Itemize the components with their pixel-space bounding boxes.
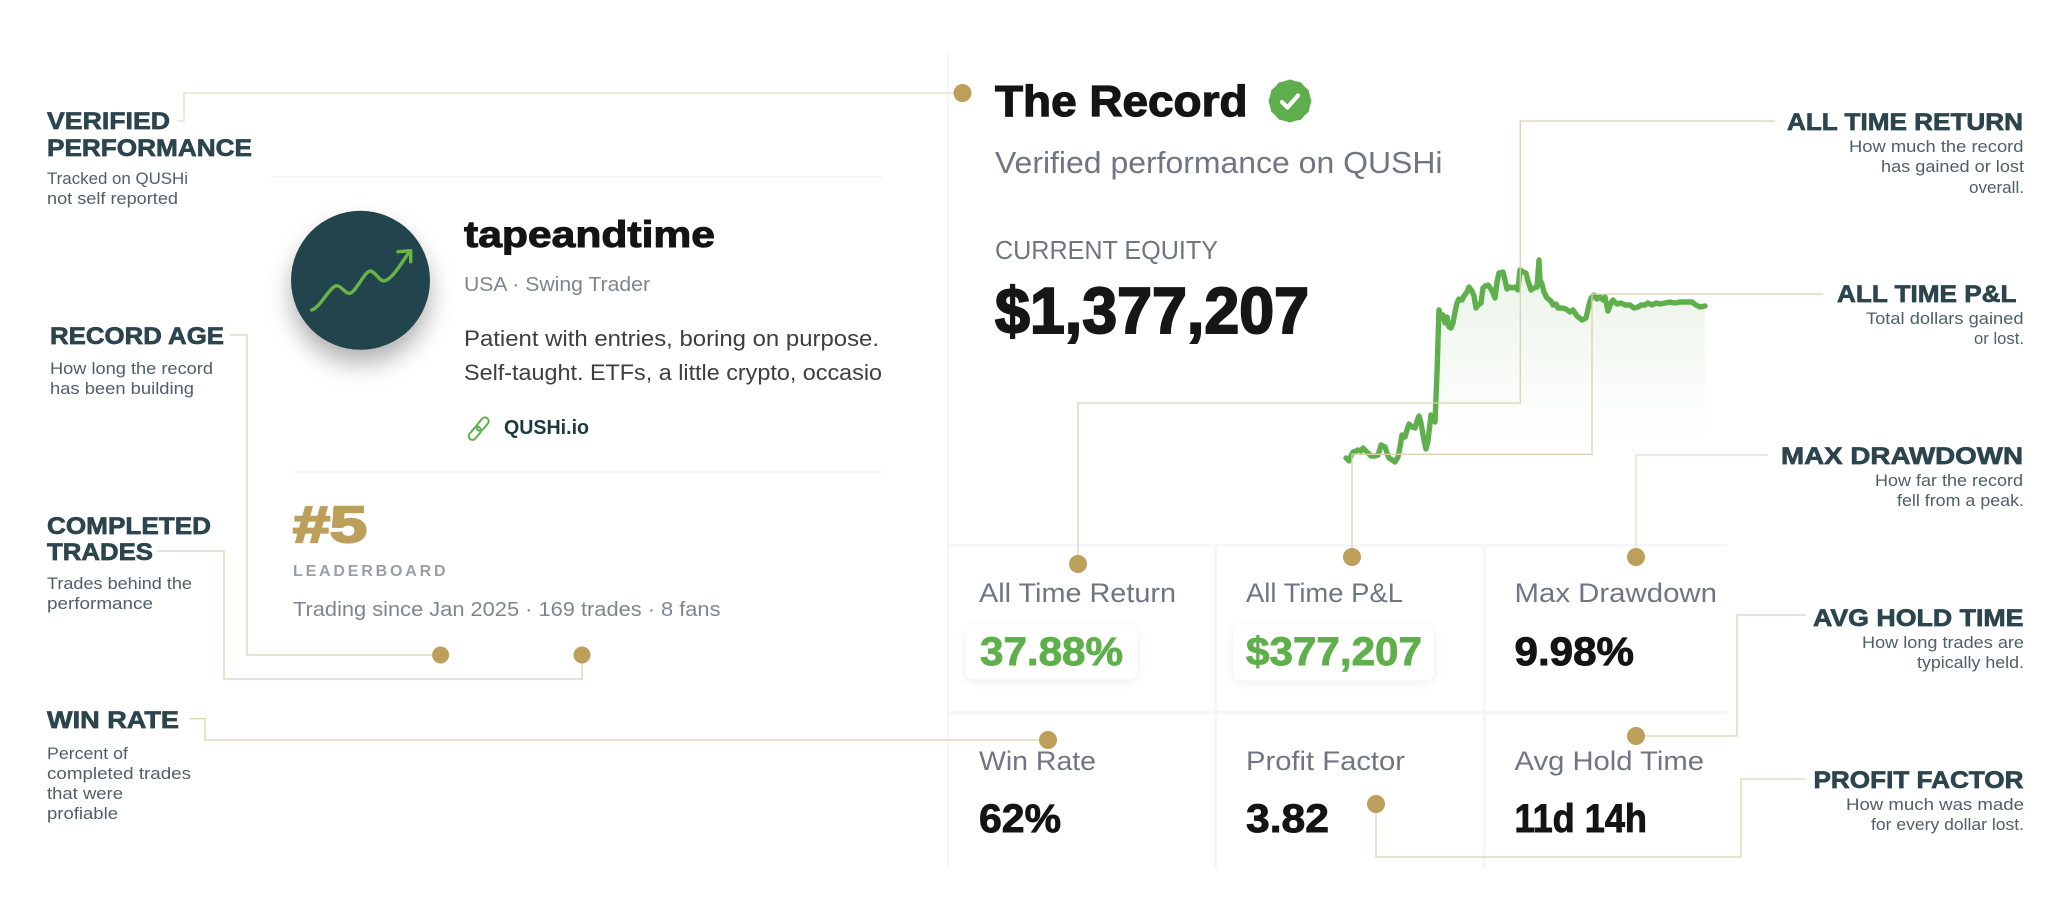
callout: win rate: Percent of xyxy=(47,744,128,763)
callout: all time P&L: ALL TIME P&L xyxy=(1837,281,2017,308)
callout: all time P&L: or lost. xyxy=(1974,329,2024,348)
icon: verified badge xyxy=(1270,80,1310,122)
callout: profit factor: PROFIT FACTOR xyxy=(1814,767,2024,794)
callout: all time return xyxy=(1787,109,2024,197)
connector: record age xyxy=(230,335,441,655)
metric: all time return: 37.88% xyxy=(980,630,1123,674)
callout: record age xyxy=(50,323,224,398)
callout: max drawdown: MAX DRAWDOWN xyxy=(1781,443,2023,470)
callout markers xyxy=(432,84,1645,813)
metric: max drawdown: Max Drawdown xyxy=(1514,578,1717,608)
callout: completed trades: performance xyxy=(47,594,153,613)
panel: metric grid lines xyxy=(271,50,1727,869)
metric: profit factor xyxy=(1246,746,1405,841)
icon: avatar with rising arrow xyxy=(291,211,430,350)
metric: avg hold time: Avg Hold Time xyxy=(1514,746,1704,776)
callout: verified performance: not self reported xyxy=(47,189,178,208)
callout: avg hold time xyxy=(1813,605,2024,672)
callout: profit factor: How much was made xyxy=(1846,795,2024,814)
callout: all time P&L xyxy=(1837,281,2024,348)
callout: max drawdown: fell from a peak. xyxy=(1897,491,2024,510)
connector: all time return xyxy=(1078,121,1775,564)
callout: max drawdown: How far the record xyxy=(1875,471,2023,490)
metric: win rate: Win Rate xyxy=(979,746,1096,776)
callout: record age: has been building xyxy=(50,379,194,398)
callout: avg hold time: How long trades are xyxy=(1862,633,2024,652)
connector: verified performance xyxy=(177,93,962,121)
current equity label: CURRENT EQUITY xyxy=(995,235,1218,265)
callout: win rate: profiable xyxy=(47,804,118,823)
callout: all time return: How much the record xyxy=(1849,137,2024,156)
callout: max drawdown xyxy=(1781,443,2024,510)
callout: avg hold time: typically held. xyxy=(1917,653,2024,672)
callout: verified performance: Tracked on QUSHi xyxy=(47,169,188,188)
metric: all time P&L: All Time P&L xyxy=(1246,578,1403,608)
callout: win rate xyxy=(47,707,191,823)
connector: max drawdown xyxy=(1636,455,1768,557)
metric: max drawdown xyxy=(1514,578,1717,674)
chart: equity curve xyxy=(1346,260,1705,462)
callout: record age: How long the record xyxy=(50,359,213,378)
callout: verified performance: VERIFIED xyxy=(47,108,170,135)
metric: all time P&L xyxy=(1233,578,1434,680)
connector: profit factor xyxy=(1376,779,1805,857)
subheading: Verified performance on QUSHi xyxy=(995,145,1442,180)
callout: profit factor: for every dollar lost. xyxy=(1871,815,2024,834)
callout: profit factor xyxy=(1814,767,2024,834)
leaderboard rank: #5 xyxy=(293,496,367,553)
callout: verified performance xyxy=(47,108,252,208)
callout: completed trades: Trades behind the xyxy=(47,574,192,593)
metric: win rate xyxy=(979,746,1096,841)
metric: win rate: 62% xyxy=(979,797,1061,841)
profile: bio: Self-taught. ETFs, a little crypto, occasio xyxy=(464,360,882,385)
callout: verified performance: PERFORMANCE xyxy=(47,135,252,162)
callout: win rate: completed trades xyxy=(47,764,191,783)
callout: completed trades: TRADES xyxy=(47,539,153,566)
metric: avg hold time: 11d 14h xyxy=(1514,797,1647,841)
profile: bio xyxy=(464,326,882,385)
icon: link xyxy=(467,416,490,441)
callout: all time return: ALL TIME RETURN xyxy=(1787,109,2023,136)
callout: avg hold time: AVG HOLD TIME xyxy=(1813,605,2024,632)
callout: record age: RECORD AGE xyxy=(50,323,224,350)
metric: all time return xyxy=(966,578,1176,680)
heading: The Record: The Record xyxy=(995,77,1248,126)
connector: avg hold time xyxy=(1636,615,1806,736)
current equity value: $1,377,207 xyxy=(995,274,1309,347)
leaderboard label: LEADERBOARD xyxy=(293,563,446,580)
callout: all time return: has gained or lost xyxy=(1881,157,2024,176)
metric: avg hold time xyxy=(1514,746,1704,841)
metric: profit factor: Profit Factor xyxy=(1246,746,1405,776)
connector: all time P&L xyxy=(1352,294,1823,557)
callout: win rate: WIN RATE xyxy=(47,707,179,734)
profile: name: tapeandtime xyxy=(464,214,715,255)
profile: location and style: USA · Swing Trader xyxy=(464,273,650,296)
metric: max drawdown: 9.98% xyxy=(1514,630,1634,674)
connector: win rate xyxy=(190,719,1048,740)
connector: completed trades xyxy=(157,551,582,679)
profile: link text: QUSHi.io xyxy=(504,416,589,439)
metric: profit factor: 3.82 xyxy=(1246,797,1329,841)
callout: all time return: overall. xyxy=(1969,178,2024,197)
callout: win rate: that were xyxy=(47,784,123,803)
callout: completed trades xyxy=(47,513,211,613)
callout: completed trades: COMPLETED xyxy=(47,513,211,540)
profile: bio: Patient with entries, boring on purpose. xyxy=(464,326,879,351)
callout: all time P&L: Total dollars gained xyxy=(1866,309,2024,328)
metric: all time return: All Time Return xyxy=(979,578,1176,608)
metric: all time P&L: $377,207 xyxy=(1246,630,1422,674)
trading summary: Trading since Jan 2025 · 169 trades · 8 fans xyxy=(293,598,720,621)
